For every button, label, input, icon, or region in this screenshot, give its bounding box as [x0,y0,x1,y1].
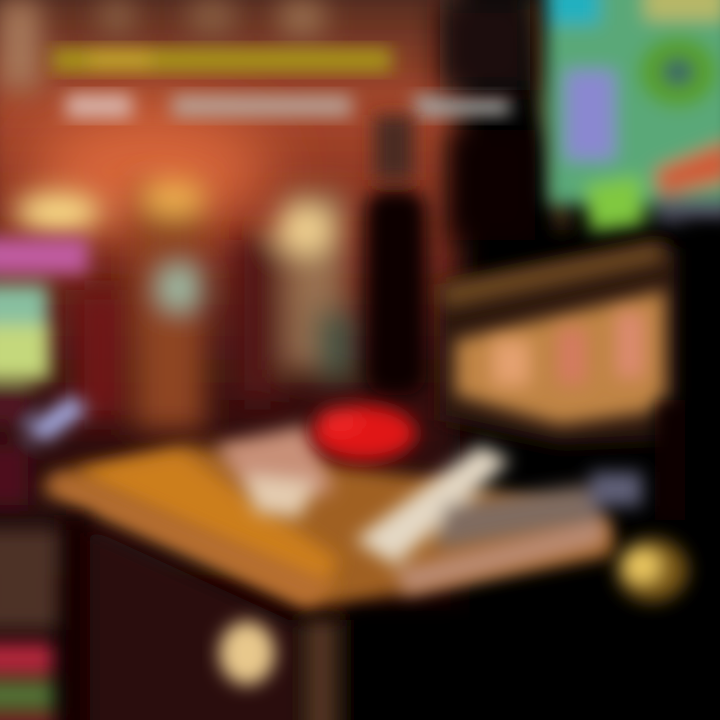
dark gap behind figure [440,0,535,240]
table: wooden surface [40,445,615,610]
right pillar [522,0,570,230]
table: cabinet front [60,515,720,720]
gold knob at table corner [616,538,688,602]
heading band: white title line [66,94,510,118]
glowing arches and doors [14,180,355,430]
standing figure [366,115,426,395]
slot screen: colourful left [0,238,88,505]
papers and cards on table [215,425,642,595]
top wall pattern [0,0,324,90]
striped carpet [0,530,58,720]
slot machine reels [440,240,680,445]
slot screen: colourful top right [545,0,720,232]
right dark edge [655,225,720,525]
red object on table [312,405,416,461]
cream knob on cabinet [219,621,275,685]
heading band: yellow title line [52,48,392,72]
